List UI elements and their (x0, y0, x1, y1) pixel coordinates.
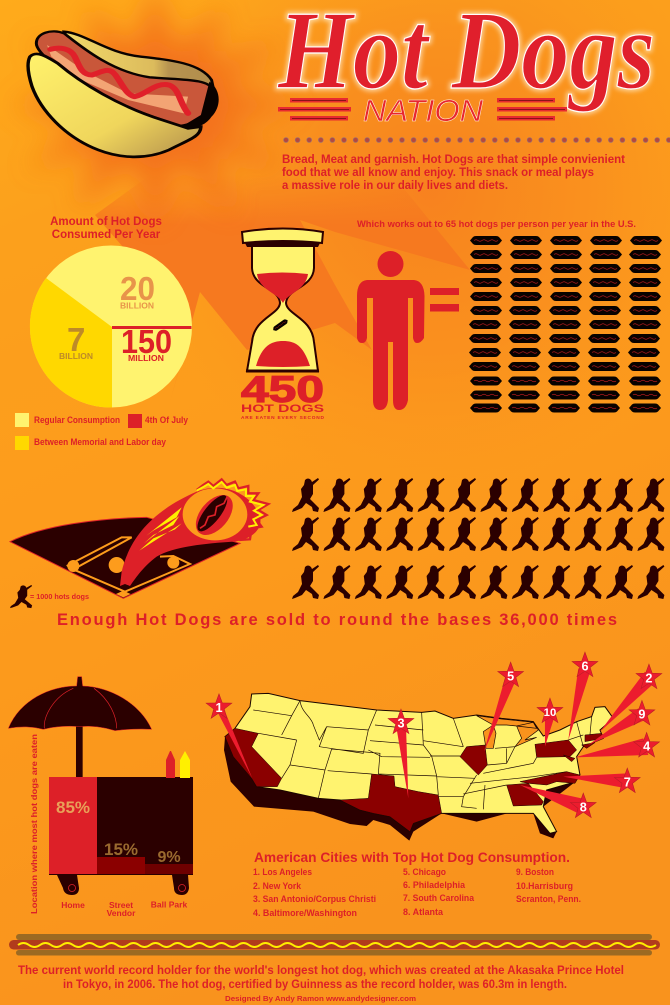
cart labels: Vendor (107, 908, 136, 918)
star 7: South Carolina (563, 768, 640, 793)
star 1: Los Angeles (206, 694, 252, 778)
star 9: Boston: 9 (638, 708, 645, 722)
map of the United States (224, 693, 613, 841)
icon: hot dog illustration (28, 31, 219, 157)
intro paragraph: a massive role in our daily lives and diets. (282, 180, 508, 192)
footer paragraph: world record: in Tokyo, in 2006. The hot dog, certified by Guinness as the record holder, was 60.3m in length. (63, 977, 567, 991)
pie chart: hot dogs consumed per year: MILLION (128, 353, 164, 363)
icon: world's longest hot dog (9, 934, 660, 956)
city list: 3. San Antonio/Corpus Christi (253, 894, 376, 904)
bar: street vendor (97, 857, 145, 874)
city list: 7. South Carolina (403, 893, 475, 903)
footer paragraph: world record: The current world record holder for the world's longest hot dog, which was created at the Akasaka Prince Hotel (18, 963, 624, 977)
star 6: Philadelphia: 6 (581, 659, 588, 673)
star 10: Harrisburg: 10 (544, 707, 556, 719)
icon: umbrella (8, 677, 152, 778)
cart labels: Ball Park (151, 900, 187, 910)
stat: 450 hot dogs per second (241, 369, 325, 421)
bar chart cart: where hot dogs are eaten (49, 777, 193, 875)
stat: 450 hot dogs per second: 450 (241, 369, 324, 410)
bar: home (49, 777, 97, 874)
lakes (477, 716, 538, 748)
intro paragraph (282, 154, 625, 192)
credit line: Designed By Andy Ramon www.andydesigner.com (225, 994, 416, 1003)
heading: pie chart title: Consumed Per Year (52, 229, 161, 241)
cart wheels (57, 875, 189, 895)
icon: person (357, 251, 424, 410)
pie chart legend (15, 413, 188, 450)
heading: pie chart title (50, 216, 162, 241)
cart labels: Street (109, 900, 133, 910)
bar chart cart: where hot dogs are eaten: 9% (157, 849, 181, 866)
footer paragraph: world record (18, 963, 624, 991)
star 9: Boston (588, 700, 655, 745)
star 3: San Antonio: 3 (397, 716, 405, 730)
city list: Scranton, Penn. (516, 894, 581, 904)
city list: 5. Chicago (403, 867, 446, 877)
city list (253, 867, 581, 918)
city list: 8. Atlanta (403, 907, 444, 917)
bar chart cart: where hot dogs are eaten: 85% (56, 798, 90, 817)
city list: 9. Boston (516, 867, 554, 877)
star 5: Chicago: 5 (507, 669, 514, 683)
heading: top cities: American Cities with Top Hot Dog Consumption. (254, 849, 570, 865)
stat: 450 hot dogs per second: HOT DOGS (241, 403, 324, 415)
batter legend: = 1000 hots dogs (30, 594, 89, 601)
star 6: Philadelphia (568, 652, 598, 740)
star 10: Harrisburg (537, 698, 563, 747)
star 7: South Carolina: 7 (624, 775, 631, 789)
equals sign (430, 288, 459, 312)
dotted divider (284, 138, 670, 142)
map pointers and numbered stars (206, 652, 662, 818)
rotated axis label: Location where most hot dogs are eaten (29, 734, 39, 914)
pie chart: hot dogs consumed per year: BILLION (59, 351, 93, 361)
batter legend (10, 585, 89, 608)
pie chart: hot dogs consumed per year: 150 (121, 323, 172, 360)
icon: baseball field with flaming hot dog comet (10, 479, 268, 598)
city list: 1. Los Angeles (253, 867, 312, 877)
pie chart: hot dogs consumed per year: 7 (67, 321, 85, 358)
batter icon rows: each equals 1000 hot dogs (292, 478, 664, 599)
star 8: Atlanta: 8 (580, 800, 587, 814)
pie chart legend: Between Memorial and Labor day (34, 437, 166, 447)
star 2: New York: 2 (645, 671, 652, 685)
intro paragraph: food that we all know and enjoy. This snack or meal plays (282, 167, 594, 179)
pie chart legend: Regular Consumption (34, 415, 120, 425)
bar chart cart: where hot dogs are eaten: 15% (104, 840, 138, 859)
city list: 4. Baltimore/Washington (253, 908, 357, 918)
star 1: Los Angeles: 1 (215, 701, 223, 715)
grid of 65 hot dogs (469, 236, 662, 412)
star 8: Atlanta (520, 785, 596, 818)
pie chart legend: 4th Of July (145, 415, 188, 425)
city list: 10.Harrisburg (516, 881, 573, 891)
cart labels (61, 900, 187, 918)
pie chart: hot dogs consumed per year: BILLION (120, 300, 154, 310)
star 4: Baltimore/Washington: 4 (643, 740, 650, 754)
subtitle: nation with neon lines: NATION (363, 93, 484, 128)
city list: 2. New York (253, 881, 302, 891)
heading: hot dogs per person: Which works out to 65 hot dogs per person per year in the U.S. (357, 219, 636, 230)
pie chart: hot dogs consumed per year: 20 (120, 270, 155, 307)
pie chart: hot dogs consumed per year (30, 246, 192, 408)
highlighted states (225, 728, 603, 832)
heading: round the bases: Enough Hot Dogs are sold to round the bases 36,000 times (57, 611, 617, 629)
star 5: Chicago (484, 662, 523, 752)
cart labels: Home (61, 900, 85, 910)
stat: 450 hot dogs per second: ARE EATEN EVERY SECOND (241, 415, 325, 421)
bar: ball park (145, 864, 193, 874)
heading: pie chart title: Amount of Hot Dogs (50, 216, 162, 228)
star 4: Baltimore/Washington (575, 732, 659, 757)
city list: 6. Philadelphia (403, 880, 466, 890)
star 2: New York (600, 664, 662, 732)
star 3: San Antonio (388, 709, 414, 798)
icon: hourglass (242, 228, 323, 371)
icon: condiment bottles (166, 751, 190, 778)
intro paragraph: Bread, Meat and garnish. Hot Dogs are that simple convienient (282, 154, 625, 166)
